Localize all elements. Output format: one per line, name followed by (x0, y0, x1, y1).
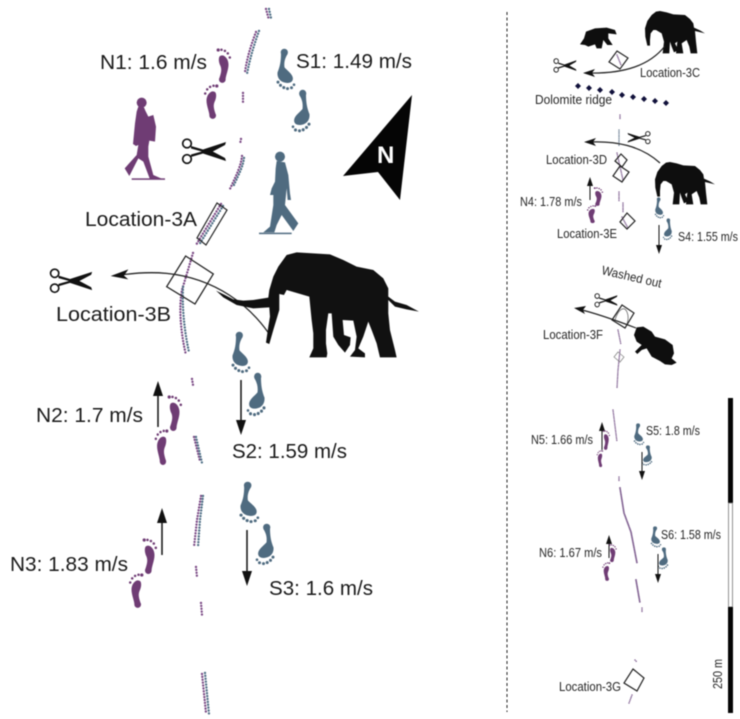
arrow S3 (242, 530, 252, 586)
icon: scissors (554, 59, 576, 72)
arrow S6 (655, 554, 661, 583)
label Location-3A: Location-3A (85, 208, 197, 231)
arrow N2 (153, 381, 163, 427)
location 3D markers (613, 154, 629, 182)
icon: scissors (183, 139, 226, 163)
footprints N6 (602, 544, 617, 581)
icon: adult carrying child (125, 98, 165, 180)
footprints N4 (587, 187, 603, 223)
location 3G marker (624, 669, 644, 691)
divider between panels (506, 12, 508, 712)
icon: scissors (628, 132, 650, 144)
label Location-3D: Location-3D (546, 153, 607, 167)
label S5: S5: 1.8 m/s (646, 424, 700, 438)
location 3F marker (612, 305, 634, 328)
arrow N4 (587, 177, 593, 200)
footprints N5 (597, 430, 610, 467)
label S2: S2: 1.59 m/s (232, 440, 347, 463)
footprints S4 (655, 197, 672, 240)
label N3: N3: 1.83 m/s (10, 553, 128, 576)
label Location-3B: Location-3B (56, 303, 171, 326)
label N6: N6: 1.67 m/s (539, 546, 602, 560)
label Location-3C: Location-3C (640, 66, 700, 80)
label S6: S6: 1.58 m/s (661, 528, 721, 542)
label S3: S3: 1.6 m/s (269, 577, 373, 600)
label N5: N5: 1.66 m/s (531, 433, 593, 447)
icon: elephant, location 3C (645, 11, 705, 53)
icon: scissors (51, 269, 92, 292)
arrow S4 (656, 225, 662, 254)
icon: mammoth (216, 252, 419, 357)
location 3B marker (167, 256, 213, 304)
footprints S2 (232, 332, 266, 416)
small marker below 3F (614, 352, 624, 362)
footprints S1 (276, 49, 310, 132)
dolomite ridge markers (575, 83, 669, 106)
footprints N1 (204, 48, 231, 119)
arrow N6 (606, 535, 612, 558)
location 3A marker (197, 203, 227, 245)
curved arrow from elephant (111, 269, 268, 333)
label N2: N2: 1.7 m/s (36, 404, 143, 427)
footprints S3 (239, 482, 274, 565)
curved arrow 3D (584, 138, 660, 163)
trackway: thin dotted segments (613, 55, 642, 703)
arrow S2 (236, 380, 246, 435)
icon: scissors (595, 294, 617, 307)
label Location-3E: Location-3E (557, 227, 617, 241)
curved arrow 3C (583, 46, 665, 77)
location 3C marker (609, 51, 628, 69)
icon: ground sloth (580, 28, 617, 48)
icon: walking person (259, 152, 298, 234)
label S1: S1: 1.49 m/s (296, 50, 412, 73)
panel: detailed tracks, left (10, 9, 419, 714)
arrow N3 (157, 508, 167, 555)
label N1: N1: 1.6 m/s (100, 51, 207, 74)
label Location-3G: Location-3G (559, 680, 621, 694)
footprints N3 (129, 538, 157, 608)
label Dolomite ridge: Dolomite ridge (535, 93, 612, 107)
label Location-3F: Location-3F (543, 328, 603, 342)
footprints S6 (651, 526, 668, 569)
footprints S5 (634, 423, 652, 466)
panel: overview of trackway, right (520, 11, 738, 713)
location 3E marker (620, 213, 635, 229)
label N4: N4: 1.78 m/s (520, 195, 582, 209)
icon: bear-like animal (634, 327, 677, 365)
arrow N5 (599, 422, 605, 450)
scale bar (728, 398, 733, 713)
icon: north arrow: N (377, 142, 394, 169)
icon: north arrow (343, 95, 412, 200)
icon: elephant, location 3D (655, 162, 715, 204)
label 250 m: 250 m (711, 659, 725, 689)
arrow S5 (639, 452, 645, 480)
label Washed out: Washed out (600, 263, 663, 291)
footprints N2 (155, 395, 182, 465)
arrow 3F (574, 306, 636, 328)
trackway: upper section (180, 9, 271, 714)
